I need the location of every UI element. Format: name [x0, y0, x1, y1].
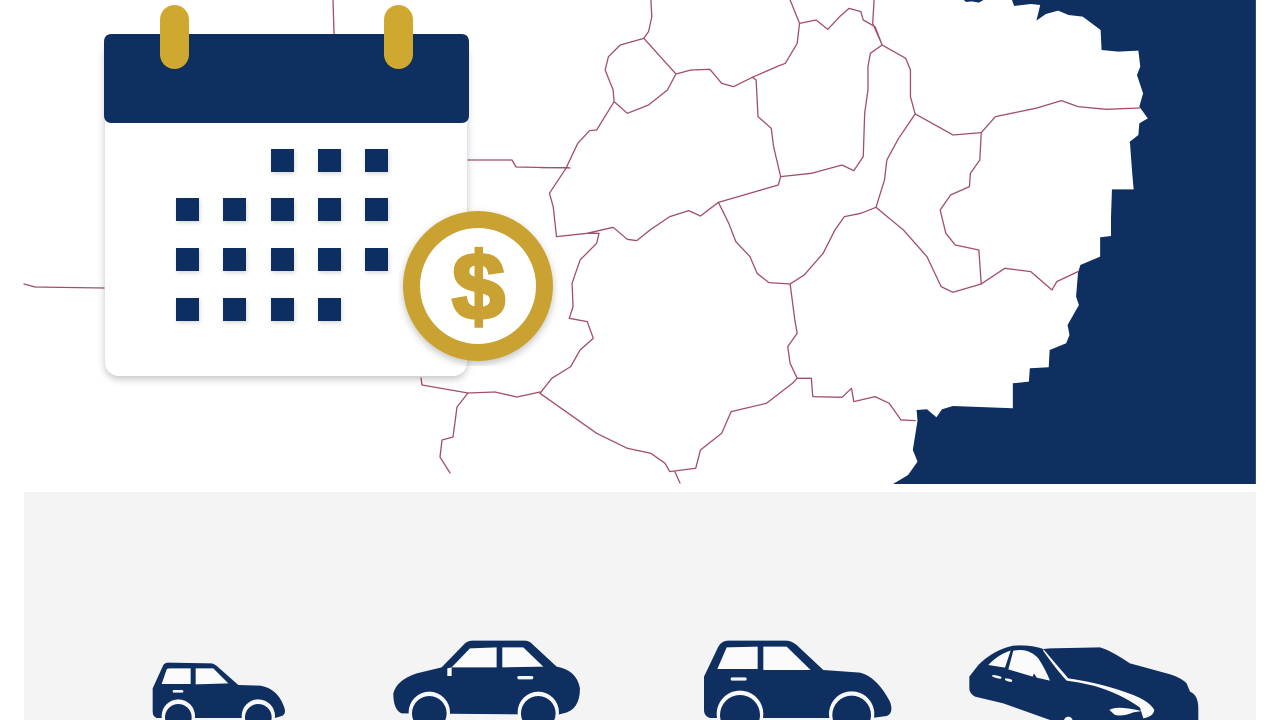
sea area [893, 0, 1256, 484]
icon: calendar [104, 5, 469, 376]
icon: gold dollar coin: $ [452, 234, 505, 340]
calendar page [105, 40, 467, 376]
panel: vehicles [24, 492, 1256, 720]
icon: sedan [393, 641, 580, 720]
calendar day squares [176, 149, 388, 321]
region borders east [540, 0, 1139, 472]
icon: small hatchback [153, 663, 285, 720]
icon: sports car [969, 645, 1198, 720]
icon: gold dollar coin [412, 220, 544, 352]
region borders west [24, 0, 680, 483]
calendar rings [160, 5, 413, 69]
calendar header [104, 34, 469, 123]
icon: station wagon [704, 641, 891, 720]
map of regions [24, 0, 1256, 484]
